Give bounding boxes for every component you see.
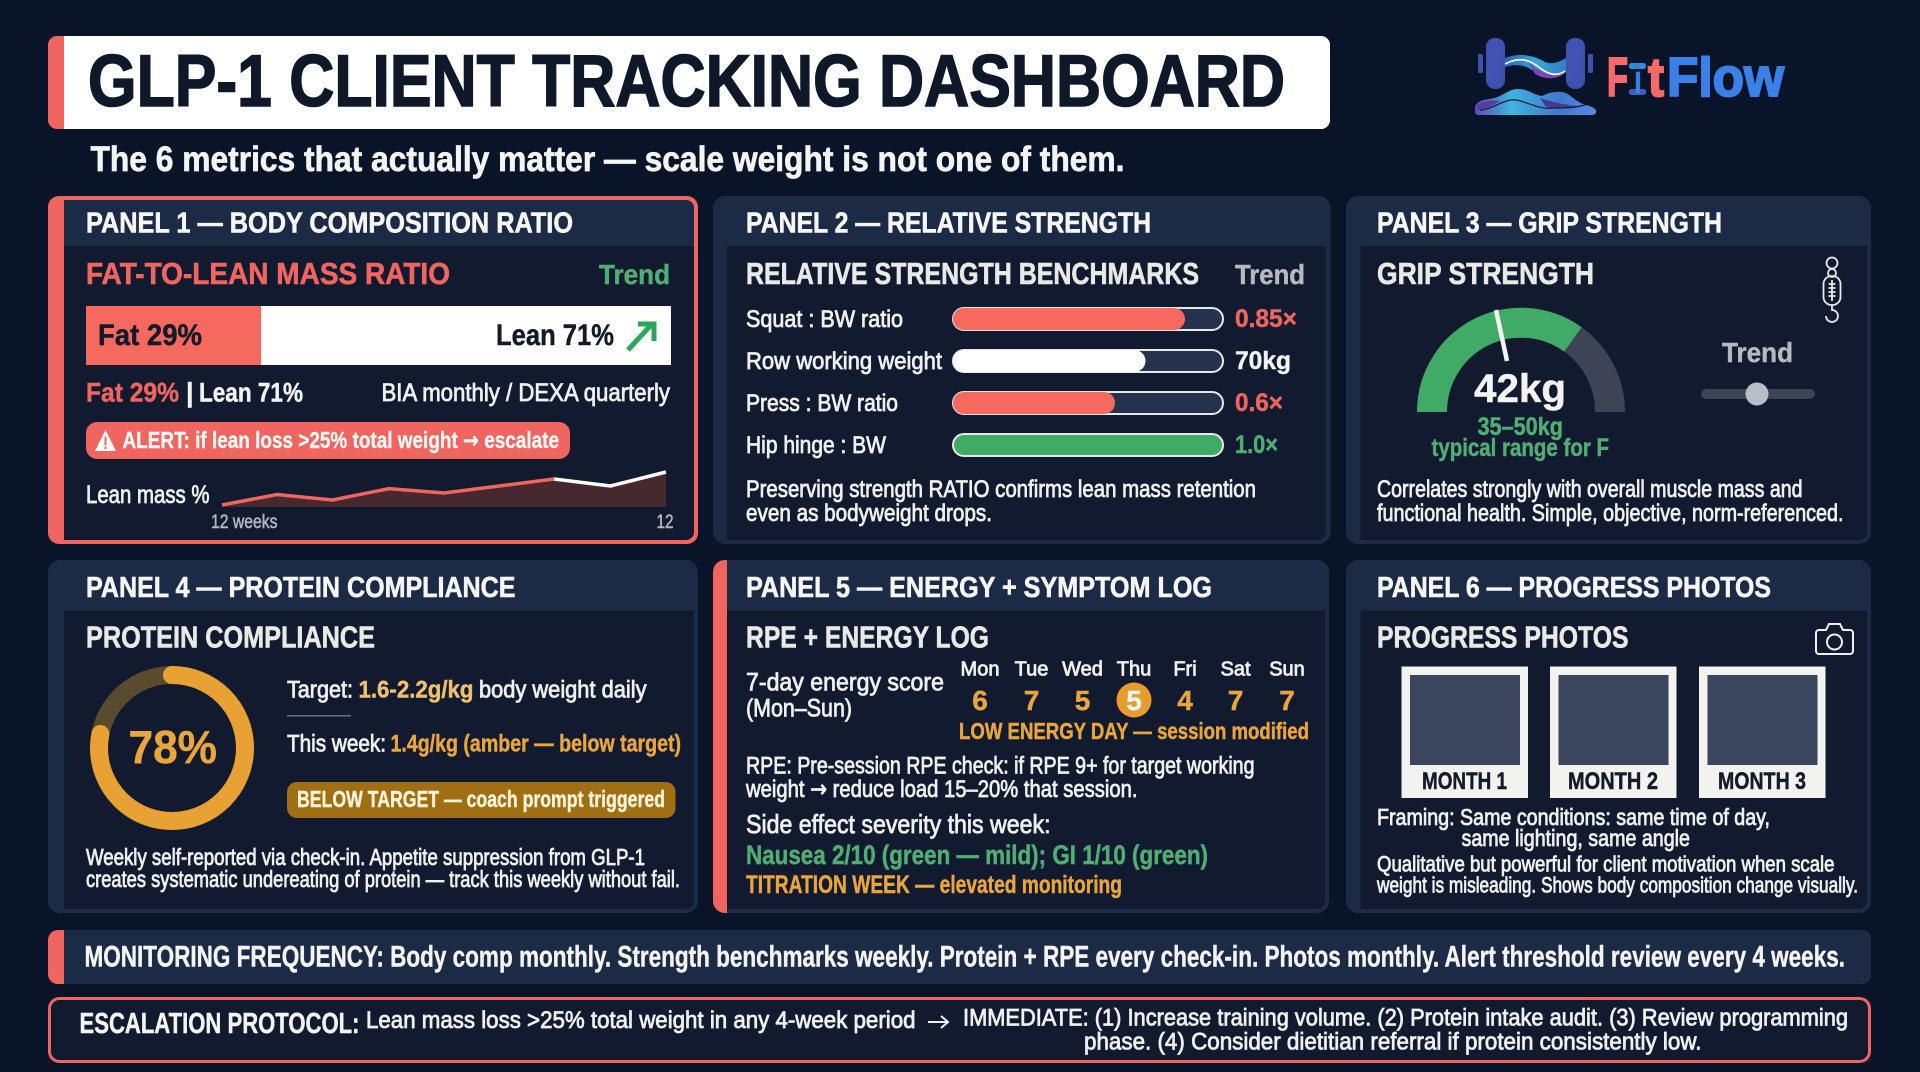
donut chart 78%: 78% <box>128 721 217 773</box>
monitoring frequency banner <box>48 930 1871 984</box>
gauge: 42kg <box>1474 367 1566 411</box>
logo: FitFlow <box>1475 38 1784 115</box>
row: squat: 0.85× <box>1235 305 1297 333</box>
framing note: same lighting, same angle <box>1462 825 1690 851</box>
weekly energy table: Sat <box>1220 658 1251 680</box>
protein note <box>86 844 680 892</box>
RPE note: RPE: Pre-session RPE check: if RPE 9+ for target working <box>746 752 1254 780</box>
alert pill <box>86 422 570 459</box>
row: row working weight: Row working weight <box>746 348 942 375</box>
lean mass sparkline <box>86 472 674 533</box>
log title: RPE + ENERGY LOG <box>746 620 989 654</box>
row: hip hinge <box>746 431 1278 459</box>
icon: camera <box>1816 624 1853 654</box>
weekly energy table: 5 <box>1075 685 1090 716</box>
weekly energy table: 7 <box>1228 685 1243 716</box>
trend slider <box>1701 337 1815 406</box>
icon: up arrow <box>628 324 654 350</box>
panel 5 heading: PANEL 5 — ENERGY + SYMPTOM LOG <box>746 572 1212 604</box>
row: row working weight: 70kg <box>1235 347 1291 375</box>
weekly energy table: 7 <box>1279 685 1295 716</box>
weekly energy table: 6 <box>972 685 988 716</box>
row: row working weight <box>746 347 1291 375</box>
measurement cadence: BIA monthly / DEXA quarterly <box>382 379 670 407</box>
weekly energy table: 7 <box>1024 685 1039 716</box>
this week line <box>287 730 681 758</box>
panel 1 heading: PANEL 1 — BODY COMPOSITION RATIO <box>86 208 573 240</box>
panel 3: grip strength <box>1346 196 1871 544</box>
trend slider: Trend <box>1722 337 1793 368</box>
target line: 1.6-2.2g/kg <box>358 676 474 704</box>
panel 6 heading: PANEL 6 — PROGRESS PHOTOS <box>1377 572 1771 604</box>
below target pill: BELOW TARGET — coach prompt triggered <box>297 786 665 812</box>
side effects: Nausea 2/10 (green — mild); GI 1/10 (green) <box>746 840 1208 870</box>
panel 2: relative strength <box>713 196 1330 544</box>
ratio readout: Fat 29% <box>86 378 179 408</box>
RPE note: weight → reduce load 15–20% that session. <box>745 775 1138 803</box>
weekly energy table: Mon <box>961 658 999 680</box>
row: press: Press : BW ratio <box>746 390 898 417</box>
protein title: PROTEIN COMPLIANCE <box>86 620 375 654</box>
trend label: Trend <box>599 259 670 290</box>
escalation protocol banner <box>50 998 1870 1062</box>
low energy callout: LOW ENERGY DAY — session modified <box>959 718 1309 744</box>
photo: month 3 <box>1699 666 1826 798</box>
RPE note <box>745 752 1254 803</box>
target line <box>287 676 646 704</box>
ratio readout: | <box>186 378 194 408</box>
this week line: This week: <box>287 730 386 758</box>
trigger text: Lean mass loss >25% total weight in any 4-week period <box>366 1007 916 1034</box>
ratio readout: Lean 71% <box>199 378 303 408</box>
wordmark: Flow <box>1667 46 1784 108</box>
wordmark: t <box>1648 46 1664 108</box>
weekly energy table: Fri <box>1173 658 1197 680</box>
weekly energy table: Sun <box>1269 658 1305 680</box>
row: press: 0.6× <box>1235 389 1283 417</box>
panel 4: protein compliance <box>48 560 698 913</box>
row: hip hinge: Hip hinge : BW <box>746 432 886 459</box>
protein note: Weekly self-reported via check-in. Appetite suppression from GLP-1 <box>86 844 645 870</box>
weekly energy table: 5 <box>1126 685 1142 716</box>
this week line: 1.4g/kg (amber — below target) <box>390 730 681 758</box>
immediate actions: phase. (4) Consider dietitian referral if protein consistently low. <box>1084 1028 1702 1056</box>
icon: hanging scale <box>1824 258 1840 322</box>
panel 3 heading: PANEL 3 — GRIP STRENGTH <box>1377 208 1722 240</box>
panel 6: progress photos <box>1346 560 1871 913</box>
weekly energy table: Tue <box>1015 658 1048 680</box>
grip note <box>1377 476 1844 527</box>
benchmarks title: RELATIVE STRENGTH BENCHMARKS <box>746 257 1199 291</box>
panel 4 heading: PANEL 4 — PROTEIN COMPLIANCE <box>86 572 516 604</box>
photos title: PROGRESS PHOTOS <box>1377 620 1628 654</box>
lean mass sparkline: 12 <box>656 512 674 533</box>
side effects: TITRATION WEEK — elevated monitoring <box>746 871 1122 899</box>
wordmark <box>1607 46 1784 108</box>
side effects <box>746 809 1208 899</box>
strength note: even as bodyweight drops. <box>746 500 992 527</box>
photos note <box>1376 852 1858 898</box>
wordmark: i <box>1634 58 1642 102</box>
framing note: Framing: Same conditions: same time of day, <box>1377 804 1770 830</box>
immediate actions <box>963 1004 1848 1056</box>
photo: month 2 <box>1550 666 1676 798</box>
photo: month 1: MONTH 1 <box>1422 768 1507 795</box>
protein note: creates systematic undereating of protein — track this weekly without fail. <box>86 866 680 892</box>
arrow <box>928 1016 948 1028</box>
target line: Target: <box>287 676 353 704</box>
title banner: GLP-1 CLIENT TRACKING DASHBOARD <box>88 41 1285 122</box>
grip title: GRIP STRENGTH <box>1377 257 1594 291</box>
photo: month 1 <box>1402 666 1528 798</box>
weekly energy table <box>961 658 1305 718</box>
target line: body weight daily <box>479 676 646 704</box>
donut chart 78% <box>99 675 245 821</box>
weekly energy table: Wed <box>1062 658 1103 680</box>
icon: dumbbell and wave <box>1475 38 1596 115</box>
gauge: 35–50kg <box>1478 413 1563 441</box>
framing note <box>1377 804 1770 851</box>
gauge <box>1432 310 1610 462</box>
stacked bar: fat vs lean <box>86 306 671 365</box>
panel 5: energy and symptom log <box>713 560 1329 913</box>
photo: month 3: MONTH 3 <box>1718 768 1806 795</box>
wordmark: F <box>1607 46 1628 108</box>
metric title: FAT-TO-LEAN MASS RATIO <box>86 257 450 291</box>
row: squat <box>746 305 1297 333</box>
energy score label: (Mon–Sun) <box>746 694 852 722</box>
grip note: Correlates strongly with overall muscle mass and <box>1377 476 1802 503</box>
weekly energy table: Thu <box>1117 658 1151 680</box>
row: hip hinge: 1.0× <box>1235 431 1278 459</box>
trend label: Trend <box>1235 259 1305 290</box>
stacked bar: fat vs lean: Lean 71% <box>496 319 614 352</box>
energy score label <box>746 668 944 722</box>
strength note: Preserving strength RATIO confirms lean mass retention <box>746 476 1256 503</box>
lean mass sparkline: Lean mass % <box>86 481 210 509</box>
panel 2 heading: PANEL 2 — RELATIVE STRENGTH <box>746 208 1151 240</box>
photos note: Qualitative but powerful for client motivation when scale <box>1377 852 1834 876</box>
escalation label: ESCALATION PROTOCOL: <box>80 1008 360 1040</box>
photo: month 2: MONTH 2 <box>1568 768 1658 795</box>
subtitle: The 6 metrics that actually matter — scale weight is not one of them. <box>90 140 1124 179</box>
stacked bar: fat vs lean: Fat 29% <box>98 319 202 352</box>
ratio readout <box>86 378 303 408</box>
lean mass sparkline: 12 weeks <box>211 512 278 533</box>
row: squat: Squat : BW ratio <box>746 306 903 333</box>
alert pill: ALERT: if lean loss >25% total weight → escalate <box>122 427 559 454</box>
panel 1: body composition ratio <box>48 196 698 544</box>
row: press <box>746 389 1283 417</box>
weekly energy table: 4 <box>1177 685 1193 716</box>
side effects: Side effect severity this week: <box>746 809 1050 839</box>
strength note <box>746 476 1256 527</box>
below target pill <box>287 782 676 818</box>
immediate actions: IMMEDIATE: (1) Increase training volume. (2) Protein intake audit. (3) Review programming <box>963 1004 1848 1032</box>
gauge: typical range for F <box>1432 434 1609 462</box>
energy score label: 7-day energy score <box>746 668 944 696</box>
